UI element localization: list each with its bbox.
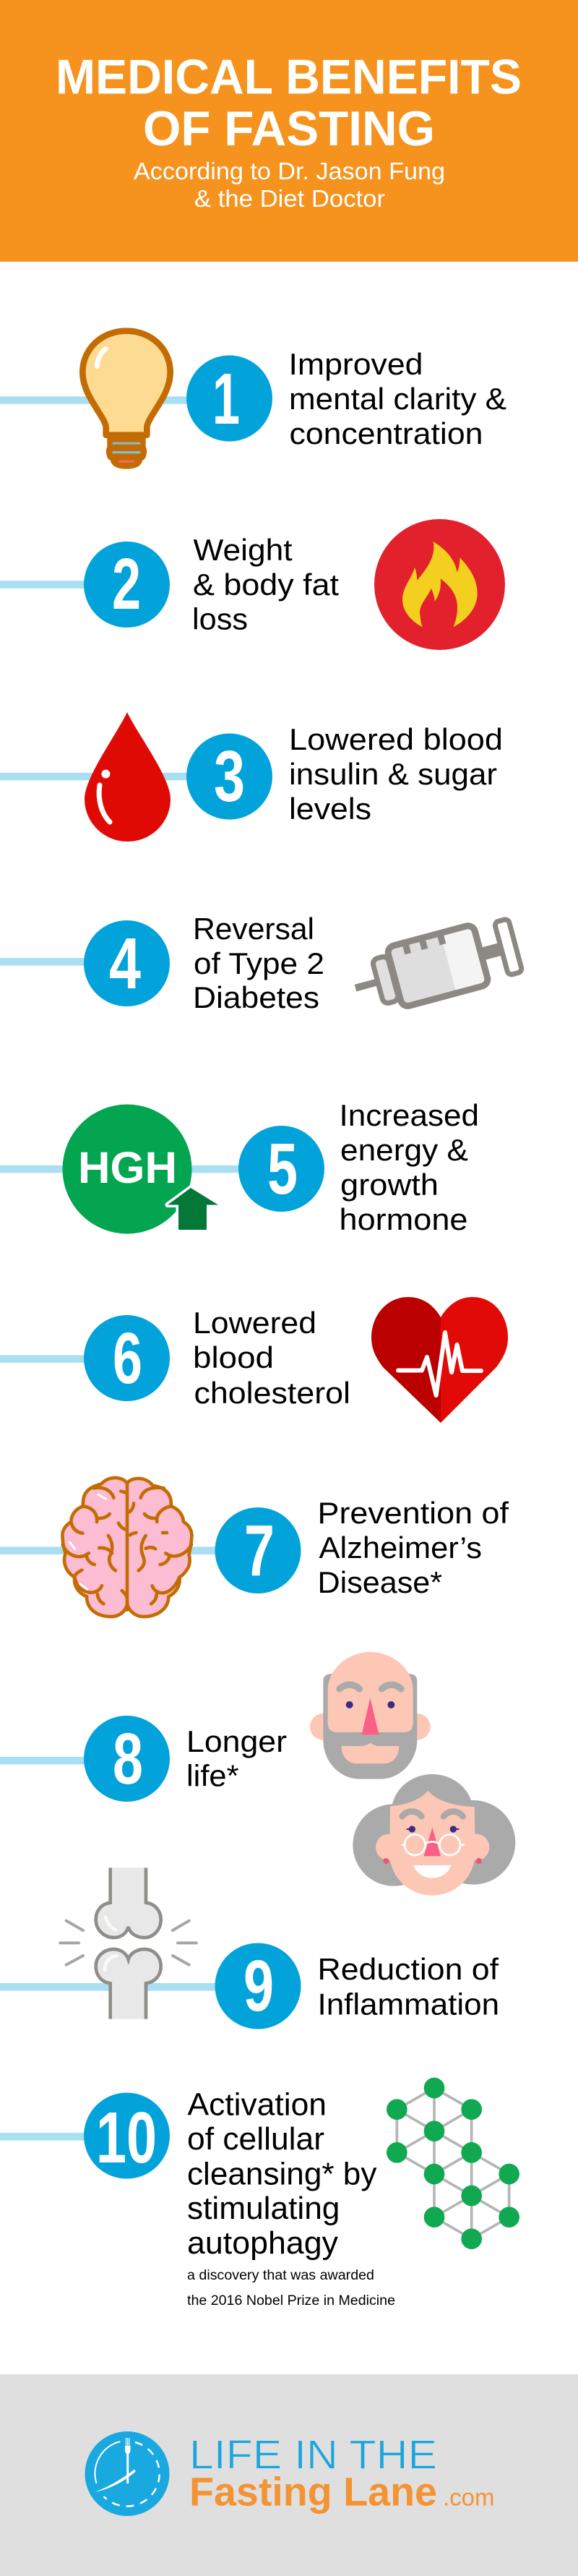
label 5: [340, 1098, 479, 1236]
connector line 10: [0, 2133, 87, 2140]
number badge 10: 10: [96, 2097, 157, 2178]
label 6: cholesterol: [194, 1376, 350, 1410]
icon: old man face: [310, 1652, 431, 1779]
connector line 1: [0, 396, 189, 404]
icon: light bulb: [82, 331, 171, 469]
label 10: Activation: [188, 2087, 327, 2123]
connector line 2: [0, 581, 87, 589]
benefit 1: mental clarity: [0, 331, 506, 469]
label 3: [289, 722, 503, 826]
icon: flame in red circle: [374, 519, 505, 650]
benefit 5: growth hormone: [0, 1098, 479, 1236]
subtitle: According to Dr. Jason Fung: [134, 158, 445, 184]
icon: HGH circle with arrow: HGH: [78, 1143, 177, 1192]
benefit 2: weight loss: [0, 519, 505, 650]
icon: brain: [62, 1478, 191, 1617]
number badge 7: 7: [244, 1510, 275, 1591]
number badge 3: [186, 733, 272, 820]
connector line 9: [0, 1983, 217, 1991]
logo: clock with fork and knife: [85, 2431, 169, 2516]
logo wordmark: [189, 2431, 494, 2515]
connector line 4: [0, 958, 87, 966]
icon: blood drop: [85, 712, 171, 842]
label 6: Lowered: [193, 1306, 316, 1340]
number badge 6: [84, 1315, 170, 1401]
number badge 5: [238, 1126, 324, 1212]
label 8: Longer: [186, 1724, 287, 1758]
label 10: of cellular: [187, 2121, 324, 2157]
label 8: [186, 1724, 287, 1793]
label 2: & body fat: [193, 568, 339, 602]
label 6: [193, 1306, 350, 1410]
label 7: Alzheimer’s: [319, 1531, 482, 1565]
subtitle: [134, 158, 445, 212]
benefit 6: cholesterol: [0, 1297, 508, 1423]
connector line 3: [0, 773, 189, 780]
label 2: Weight: [194, 533, 293, 567]
connector line 5: [0, 1165, 242, 1173]
number badge 4: 4: [109, 923, 141, 1004]
number badge 7: [215, 1507, 301, 1593]
label 7: [318, 1496, 509, 1599]
label 3: levels: [289, 792, 371, 826]
number badge 1: 1: [212, 359, 240, 440]
title: MEDICAL BENEFITS: [56, 49, 522, 104]
label 5: energy &: [340, 1133, 468, 1167]
title: [56, 49, 522, 156]
label 7: Disease*: [318, 1565, 442, 1599]
label 4: of Type 2: [194, 946, 324, 980]
logo wordmark: Fasting Lane: [189, 2469, 437, 2515]
number badge 4: [84, 920, 170, 1006]
benefit 10: autophagy: [0, 2078, 519, 2308]
header banner: [0, 0, 578, 262]
label 1: Improved: [289, 347, 423, 381]
label 9: Reduction of: [318, 1952, 499, 1986]
label 10: autophagy: [187, 2225, 338, 2261]
number badge 5: 5: [267, 1129, 298, 1210]
title: OF FASTING: [143, 101, 435, 156]
benefit 4: type 2 diabetes: [0, 912, 523, 1018]
number badge 1: [186, 356, 272, 441]
icon: knee joint bones: [60, 1867, 197, 2019]
number badge 8: 8: [113, 1719, 143, 1800]
icon: HGH circle with arrow: [62, 1105, 218, 1233]
label 10: cleansing* by: [187, 2156, 376, 2191]
icon: old woman face: [353, 1774, 515, 1896]
benefit 7: Alzheimer's: [0, 1478, 509, 1617]
number badge 2: [84, 542, 170, 628]
footnote: a discovery that was awarded: [187, 2268, 374, 2283]
label 10: stimulating: [187, 2191, 340, 2226]
connector line 7: [0, 1546, 217, 1554]
icon: molecule network: [387, 2078, 519, 2249]
number badge 6: 6: [113, 1318, 142, 1399]
label 5: Increased: [340, 1098, 479, 1132]
label 1: mental clarity &: [289, 382, 506, 416]
label 5: hormone: [340, 1202, 468, 1236]
footnote: the 2016 Nobel Prize in Medicine: [187, 2293, 395, 2308]
label 9: [318, 1952, 499, 2021]
label 3: insulin & sugar: [289, 757, 497, 791]
label 7: Prevention of: [318, 1496, 509, 1530]
icon: syringe: [348, 915, 523, 1018]
logo wordmark: .com: [443, 2484, 494, 2511]
label 3: Lowered blood: [289, 722, 503, 756]
number badge 3: 3: [214, 736, 245, 817]
number badge 2: 2: [112, 544, 141, 625]
subtitle: & the Diet Doctor: [194, 185, 385, 212]
label 6: blood: [193, 1340, 274, 1374]
label 8: life*: [186, 1758, 239, 1793]
label 2: [192, 533, 339, 636]
number badge 8: [84, 1716, 170, 1802]
benefit 3: insulin and sugar: [0, 712, 503, 842]
connector line 6: [0, 1355, 87, 1363]
footer band: [0, 2374, 578, 2576]
number badge 9: [215, 1943, 301, 2029]
label 1: concentration: [289, 416, 483, 450]
connector line 8: [0, 1757, 87, 1764]
label 2: loss: [192, 602, 248, 636]
label 1: [289, 347, 506, 450]
label 4: Diabetes: [193, 980, 319, 1014]
label 9: Inflammation: [318, 1987, 499, 2021]
label 4: Reversal: [193, 912, 314, 946]
label 4: [193, 912, 324, 1014]
icon: heart with pulse: [371, 1297, 508, 1423]
footnote: [187, 2268, 395, 2308]
logo wordmark: LIFE IN THE: [189, 2431, 437, 2478]
benefit 8: longer life: [0, 1652, 515, 1896]
benefit 9: inflammation: [0, 1867, 499, 2029]
label 5: growth: [340, 1168, 439, 1202]
label 10: [187, 2087, 376, 2261]
number badge 9: 9: [243, 1946, 274, 2027]
